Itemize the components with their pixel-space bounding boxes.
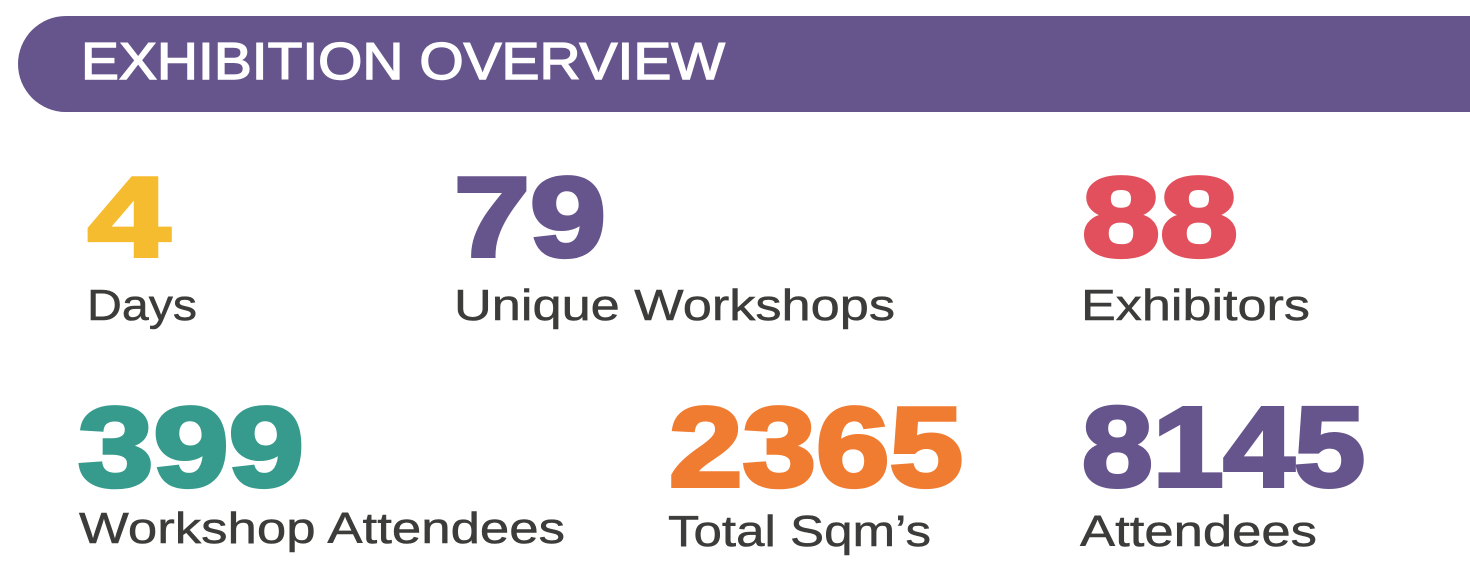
heading: EXHIBITION OVERVIEW — [81, 33, 725, 91]
stat: 399 workshop attendees: 399 — [78, 384, 304, 510]
stat: 2365 total sqm — [668, 384, 963, 556]
stat: 88 exhibitors — [1081, 154, 1310, 330]
stat: 399 workshop attendees — [78, 384, 565, 553]
stat: 79 unique workshops — [454, 154, 895, 330]
stat: 4 days: Days — [87, 281, 197, 330]
stat: 4 days: 4 — [88, 154, 170, 280]
stat: 399 workshop attendees: Workshop Attendees — [79, 504, 565, 553]
stat: 79 unique workshops: Unique Workshops — [454, 281, 895, 330]
stat: 2365 total sqm: Total Sqm’s — [668, 507, 931, 556]
stat: 8145 attendees — [1080, 384, 1365, 556]
stat: 88 exhibitors: Exhibitors — [1081, 281, 1310, 330]
stat: 4 days — [87, 154, 197, 330]
stat: 8145 attendees: Attendees — [1080, 507, 1317, 556]
header banner — [18, 16, 1470, 112]
stat: 88 exhibitors: 88 — [1082, 154, 1238, 280]
stat: 8145 attendees: 8145 — [1082, 384, 1365, 510]
stat: 79 unique workshops: 79 — [454, 154, 606, 280]
stat: 2365 total sqm: 2365 — [669, 384, 963, 510]
